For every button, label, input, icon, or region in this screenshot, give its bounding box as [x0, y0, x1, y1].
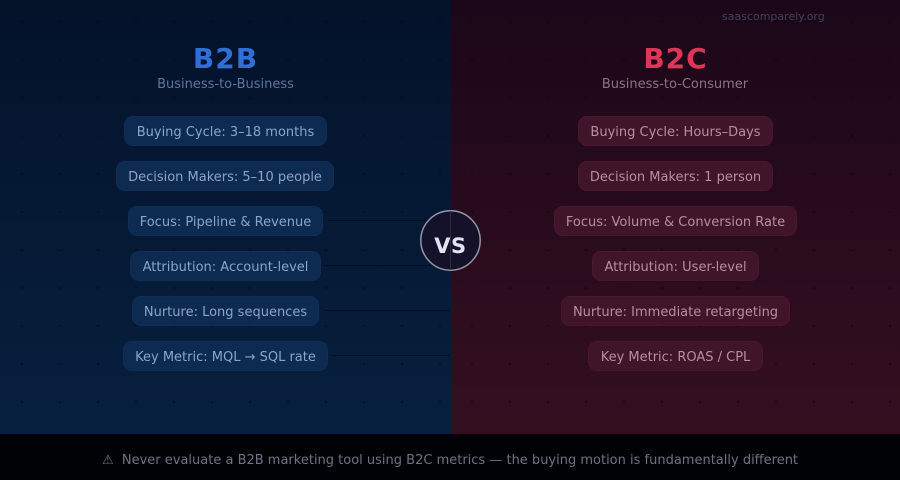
- pill: B2B nurture: [132, 296, 319, 326]
- pill: B2C buying cycle: [578, 116, 773, 146]
- VS badge: VS: [434, 234, 467, 258]
- pill: B2B attribution: Attribution: Account-level: [143, 260, 308, 275]
- website credit: saascomparely.org: [722, 10, 825, 23]
- pill: B2B decision makers: Decision Makers: 5–10 people: [128, 170, 322, 185]
- pill: B2C attribution: [592, 251, 759, 281]
- pill: B2B key metric: [123, 341, 328, 371]
- heading: B2C: B2C: [643, 42, 708, 75]
- pill: B2B focus: [128, 206, 323, 236]
- pill: B2C decision makers: Decision Makers: 1 person: [590, 170, 761, 185]
- pill: B2B buying cycle: [124, 116, 327, 146]
- pill: B2B decision makers: [116, 161, 334, 191]
- heading: B2B: B2B: [193, 42, 258, 75]
- pill: B2C key metric: Key Metric: ROAS / CPL: [601, 350, 750, 365]
- pill: B2C focus: Focus: Volume & Conversion Rate: [566, 215, 785, 230]
- pill: B2C buying cycle: Buying Cycle: Hours–Days: [590, 125, 761, 140]
- panel: B2B background: [0, 0, 451, 434]
- pill: B2C focus: [554, 206, 797, 236]
- panel: B2C background: [451, 0, 900, 434]
- pill: B2C nurture: Nurture: Immediate retargeting: [573, 305, 778, 320]
- pill: B2B attribution: [130, 251, 321, 281]
- subheading: Business-to-Consumer: Business-to-Consumer: [602, 77, 748, 92]
- footer text: ⚠ Never evaluate a B2B marketing tool using B2C metrics — the buying motion is fundamentally different: [102, 453, 798, 468]
- pill: B2C attribution: Attribution: User-level: [604, 260, 747, 275]
- pill: B2C decision makers: [578, 161, 773, 191]
- pill: B2B focus: Focus: Pipeline & Revenue: [140, 215, 311, 230]
- pill: B2B buying cycle: Buying Cycle: 3–18 months: [137, 125, 314, 140]
- pill: B2C nurture: [561, 296, 790, 326]
- VS badge: [420, 210, 481, 271]
- footer warning bar: [0, 434, 900, 480]
- pill: B2C key metric: [588, 341, 763, 371]
- pill: B2B nurture: Nurture: Long sequences: [144, 305, 307, 320]
- subheading: Business-to-Business: Business-to-Business: [157, 77, 294, 92]
- pill: B2B key metric: Key Metric: MQL → SQL rate: [135, 350, 316, 365]
